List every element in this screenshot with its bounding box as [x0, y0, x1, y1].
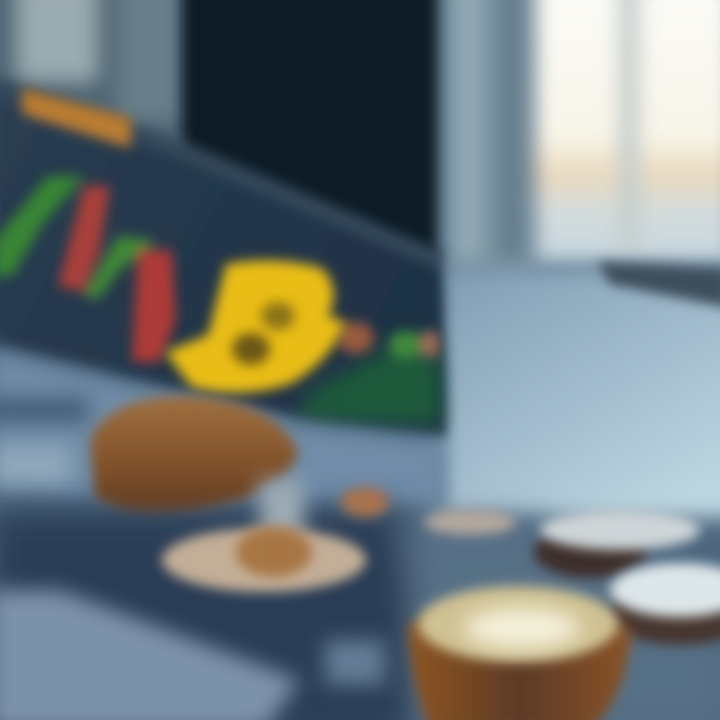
green candle 1 — [0, 176, 84, 276]
coffee cup — [408, 586, 632, 720]
candlestick chart — [0, 176, 176, 362]
dark table front — [0, 510, 720, 720]
bright window — [534, 0, 720, 265]
dark monitor back panel — [182, 0, 440, 260]
front plate on right — [608, 563, 720, 645]
red candle 2 — [132, 250, 176, 362]
background wall: upper left — [0, 0, 190, 150]
small plate with food — [162, 527, 366, 592]
red candle 1 — [58, 186, 110, 292]
keyboard — [0, 590, 385, 720]
glass reflection — [260, 480, 304, 540]
green candle 2 — [84, 236, 156, 300]
cup crema top — [418, 586, 618, 662]
bread loaf — [90, 396, 298, 512]
pale table surface on right — [440, 268, 720, 518]
monitor stand and light desk band — [0, 350, 446, 510]
red chart markers — [338, 322, 440, 359]
lower-right chart marks — [296, 335, 440, 425]
back plate on right — [534, 510, 700, 578]
distant food pieces — [341, 487, 516, 535]
coin holes — [232, 302, 295, 365]
window frame column — [444, 0, 534, 280]
orange label on screen — [22, 88, 132, 148]
monitor screen — [0, 75, 446, 438]
bitcoin coin symbol — [165, 260, 346, 393]
window sill shadow — [598, 262, 720, 308]
